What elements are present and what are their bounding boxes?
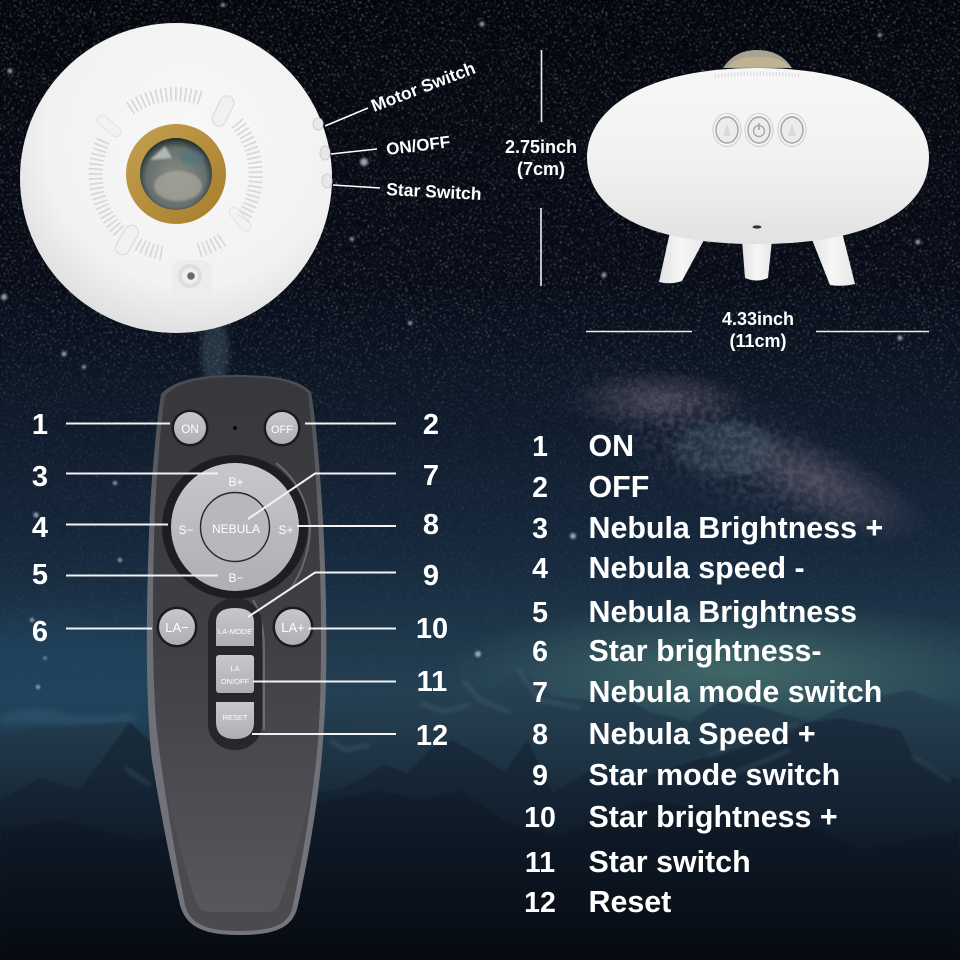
dimension: width: 4.33inch: [722, 309, 794, 329]
number labels around remote: 4: [32, 512, 48, 544]
remote control: [147, 375, 326, 935]
legend: button functions: 9: [532, 760, 548, 792]
device side view: white dome with legs: [587, 50, 929, 286]
icon: side switches: [313, 118, 332, 188]
legend: button functions: 3: [532, 513, 548, 545]
highlight edges around controls: [253, 463, 310, 730]
legend: button functions: 10: [524, 802, 556, 834]
dimension: height: 2.75inch: [505, 137, 577, 157]
icon: IR receiver: [172, 260, 212, 296]
callout: ON/OFF: [331, 132, 451, 159]
legend: button functions: Star brightness +: [588, 800, 838, 834]
number labels around remote: 2: [423, 409, 439, 441]
legend: button functions: Star brightness-: [588, 634, 822, 668]
button: LA ON/OFF: ON/OFF: [221, 677, 250, 686]
callout: ON/OFF: ON/OFF: [385, 132, 451, 159]
d-pad: S+: [278, 523, 294, 537]
dimension: width: (11cm): [729, 331, 787, 351]
d-pad: B+: [228, 475, 244, 489]
button: LA ON/OFF: [216, 655, 254, 693]
cloud band on left horizon: [0, 709, 135, 724]
legend: button functions: 12: [524, 887, 556, 919]
indicator light: [233, 426, 237, 430]
device top view: white disc: [20, 23, 332, 333]
legend: button functions: Star switch: [588, 845, 751, 879]
legend: button functions: Nebula mode switch: [588, 675, 882, 709]
legend: button functions: Nebula Brightness: [588, 595, 857, 629]
legend: button functions: 2: [532, 472, 548, 504]
legend: button functions: Reset: [588, 885, 671, 919]
number labels around remote: 10: [416, 613, 448, 645]
legend: button functions: 6: [532, 636, 548, 668]
button: LA-MODE: [216, 608, 254, 646]
legend: button functions: 4: [532, 553, 548, 585]
number labels around remote: 7: [423, 460, 439, 492]
icon: moulded slots: [95, 94, 253, 257]
number labels around remote: 11: [417, 666, 447, 698]
icon: three control buttons: [713, 114, 806, 146]
number labels around remote: 8: [423, 509, 439, 541]
legend: button functions: 7: [532, 677, 548, 709]
leader lines for remote: [66, 424, 396, 734]
d-pad: B−: [228, 571, 244, 585]
button: LA ON/OFF: LA: [230, 664, 240, 673]
button group capsule: [208, 598, 262, 750]
callout: Star Switch: Star Switch: [386, 179, 482, 204]
remote body: [147, 375, 326, 935]
button: LA-: LA−: [165, 620, 189, 635]
d-pad: [162, 455, 308, 599]
legend: button functions: Nebula Brightness +: [588, 511, 883, 545]
legend: button functions: 8: [532, 719, 548, 751]
button: ON: ON: [181, 424, 199, 436]
callout: Motor Switch: Motor Switch: [368, 58, 478, 116]
icon: lens dome: [723, 50, 792, 68]
icon: legs: [659, 232, 855, 286]
button: ON: [172, 410, 208, 446]
number labels around remote: 5: [32, 559, 48, 591]
legend: button functions: Star mode switch: [588, 758, 840, 792]
button: RESET: RESET: [222, 713, 248, 722]
button: LA-MODE: LA-MODE: [218, 627, 252, 636]
button: RESET: [216, 702, 254, 739]
legend: button functions: Nebula speed -: [588, 551, 805, 585]
legend: button functions: 1: [532, 431, 548, 463]
button: OFF: [264, 410, 300, 446]
legend: button functions: Nebula Speed +: [588, 717, 816, 751]
number labels around remote: 6: [32, 616, 48, 648]
button: LA-: [156, 606, 198, 648]
number labels around remote: 1: [32, 409, 48, 441]
button: LA+: LA+: [281, 620, 305, 635]
callout: Motor Switch: [325, 58, 478, 126]
dimension: height: (7cm): [517, 159, 565, 179]
legend: button functions: 11: [525, 847, 555, 879]
d-pad: NEBULA: [212, 522, 260, 536]
number labels around remote: 9: [423, 560, 439, 592]
number labels around remote: 3: [32, 461, 48, 493]
d-pad: S−: [178, 523, 194, 537]
dimension: width: [586, 309, 929, 351]
snow highlights on ridges: [125, 668, 950, 785]
dimension: height: [505, 50, 577, 286]
button: LA+: [272, 606, 314, 648]
callout: Star Switch: [333, 179, 482, 204]
number labels around remote: 12: [416, 720, 448, 752]
button: OFF: OFF: [271, 424, 293, 436]
legend: button functions: ON: [588, 429, 634, 463]
legend: button functions: [524, 429, 883, 919]
icon: ridges around the lens: [96, 94, 256, 253]
legend: button functions: OFF: [588, 470, 649, 504]
legend: button functions: 5: [532, 597, 548, 629]
icon: microphone hole: [745, 222, 773, 232]
icon: gold lens: [126, 124, 226, 224]
number labels around remote: [32, 409, 448, 752]
